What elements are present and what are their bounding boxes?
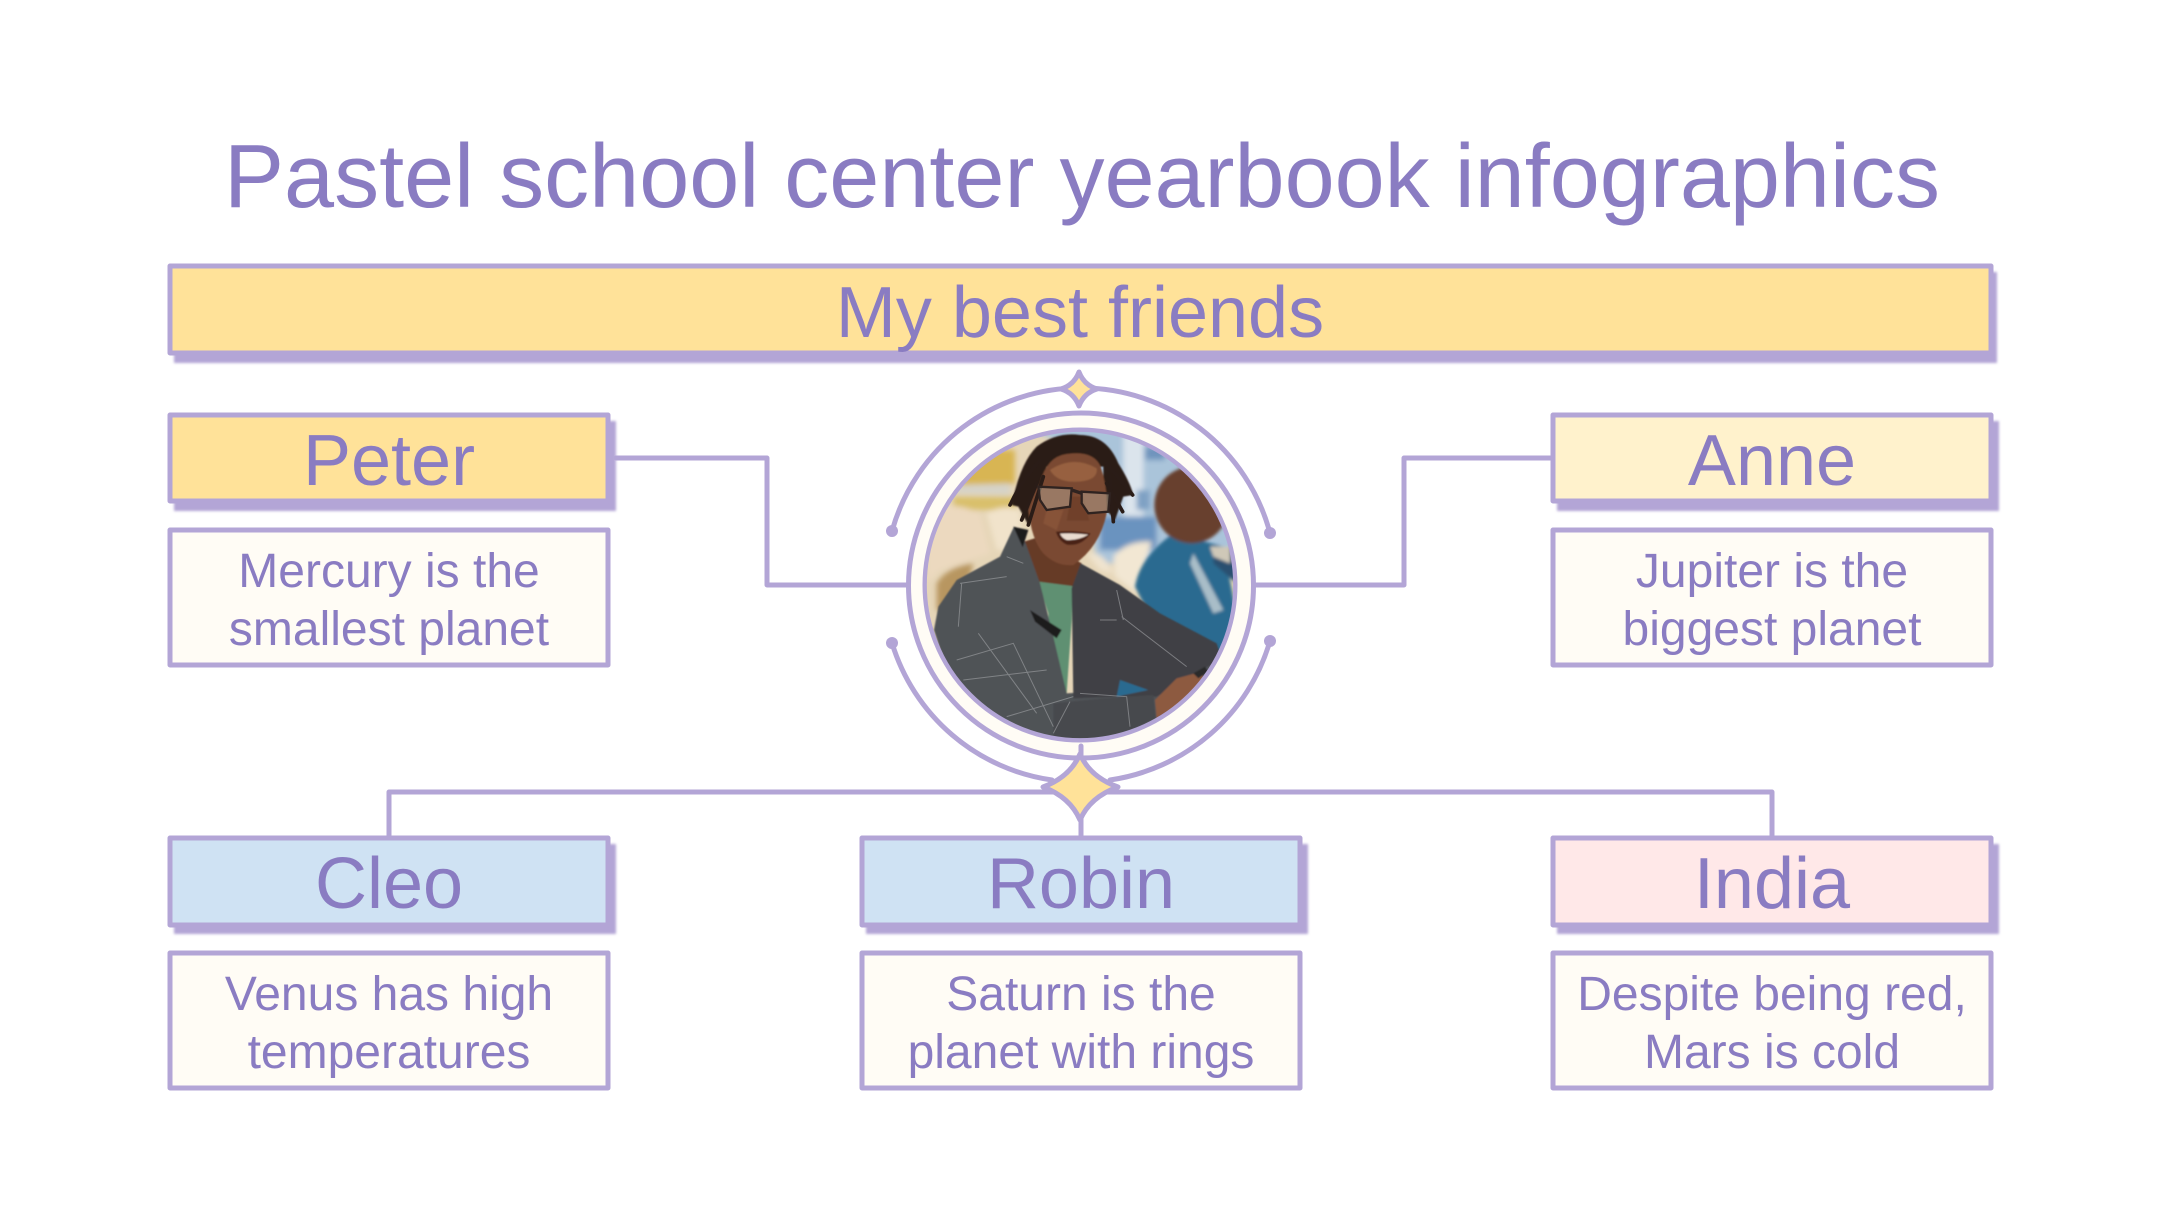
outer arc bottom — [892, 641, 1270, 780]
jacket — [934, 527, 1222, 747]
card: Anne: biggest planet — [1623, 603, 1921, 656]
hair strands — [1008, 474, 1135, 527]
card: India — [1553, 838, 1999, 1088]
neck — [1024, 537, 1082, 588]
card: Peter: smallest planet — [229, 603, 549, 656]
ring — [908, 413, 1254, 758]
card: Anne: Jupiter is the — [1636, 545, 1908, 598]
card: Peter: Peter — [303, 421, 475, 501]
card: India: Mars is cold — [1644, 1026, 1900, 1079]
card: Robin — [862, 838, 1308, 1088]
card: Anne — [1553, 415, 1999, 665]
background woman — [1132, 534, 1233, 651]
central portrait emblem — [886, 372, 1276, 820]
card: Peter: Mercury is the — [238, 545, 540, 598]
connector: Anne to photo — [1256, 458, 1551, 585]
mouth — [1056, 531, 1091, 545]
card: Cleo: Venus has high — [225, 968, 553, 1021]
portrait photo — [920, 423, 1247, 750]
face — [1028, 453, 1107, 565]
hand — [1155, 672, 1205, 718]
card: Cleo: temperatures — [248, 1026, 530, 1079]
banner: My best friends — [170, 266, 1997, 363]
glasses — [1038, 487, 1110, 513]
plaid lines — [957, 557, 1187, 733]
small star — [1061, 372, 1097, 406]
card: Peter — [170, 415, 616, 665]
connector: bottom row tree — [389, 792, 1772, 836]
card: India: Despite being red, — [1577, 968, 1967, 1021]
t-shirt — [1038, 582, 1072, 693]
card: Robin: planet with rings — [908, 1026, 1254, 1079]
outer arc top — [892, 388, 1270, 533]
title: Pastel school center yearbook infographics — [224, 127, 1940, 227]
card: Cleo — [170, 838, 616, 1088]
card: Anne: Anne — [1688, 421, 1856, 501]
card: Robin: Robin — [987, 844, 1175, 924]
connector: Peter to photo — [616, 458, 923, 585]
banner: My best friends: My best friends — [836, 273, 1324, 353]
big star — [1043, 754, 1118, 820]
card: Cleo: Cleo — [315, 844, 463, 924]
arc end dots — [886, 525, 1276, 649]
hair mass — [1012, 434, 1133, 525]
card: India: India — [1694, 844, 1851, 924]
sleeve — [1054, 698, 1154, 738]
link: photo to big star — [1078, 746, 1084, 760]
card: Robin: Saturn is the — [946, 968, 1216, 1021]
